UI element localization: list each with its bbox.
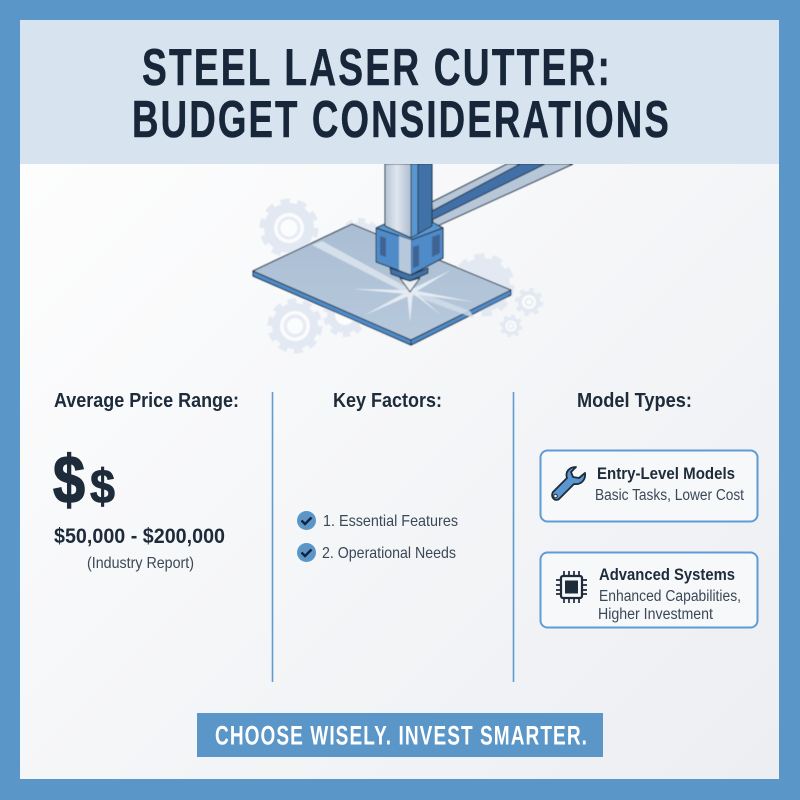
column dividers	[272, 392, 514, 682]
price range value: $50,000 - $200,000	[54, 525, 225, 548]
header band	[20, 20, 779, 164]
steel plate	[253, 224, 511, 345]
panel: average price range	[53, 390, 239, 572]
card: entry-level models: Basic Tasks, Lower Cost	[595, 487, 745, 504]
icon: microchip	[556, 571, 587, 603]
panel: key factors	[297, 390, 458, 562]
card: advanced systems: Enhanced Capabilities,	[599, 588, 741, 605]
cutting head	[376, 222, 443, 292]
icon: wrench	[552, 467, 585, 500]
call to action banner	[197, 713, 603, 757]
panel: model types	[540, 390, 758, 628]
factor 2	[297, 543, 456, 562]
factor 2: 2. Operational Needs	[322, 545, 456, 562]
laser sparks	[312, 241, 474, 322]
icon: dollar signs: $	[90, 461, 115, 514]
background gears	[263, 202, 541, 350]
source note: (Industry Report)	[87, 555, 194, 572]
column	[385, 164, 432, 238]
card: advanced systems: Higher Investment	[598, 606, 714, 623]
title: STEEL LASER CUTTER:	[142, 39, 612, 97]
heading: model types: Model Types:	[577, 390, 692, 412]
factor 1	[297, 511, 458, 530]
illustration: laser cutter	[253, 164, 573, 350]
call to action banner: CHOOSE WISELY. INVEST SMARTER.	[215, 720, 588, 750]
factor 1: 1. Essential Features	[323, 513, 458, 530]
heading: key factors: Key Factors:	[333, 390, 442, 412]
card: advanced systems	[540, 552, 758, 628]
heading: average price range: Average Price Range:	[54, 390, 239, 412]
card: entry-level models	[540, 450, 758, 522]
title	[132, 39, 671, 149]
icon: dollar signs: $	[53, 442, 85, 518]
gantry arm	[432, 164, 573, 228]
icon: dollar signs	[53, 442, 115, 518]
card: entry-level models: Entry-Level Models	[597, 464, 735, 483]
card: advanced systems: Advanced Systems	[599, 565, 735, 584]
